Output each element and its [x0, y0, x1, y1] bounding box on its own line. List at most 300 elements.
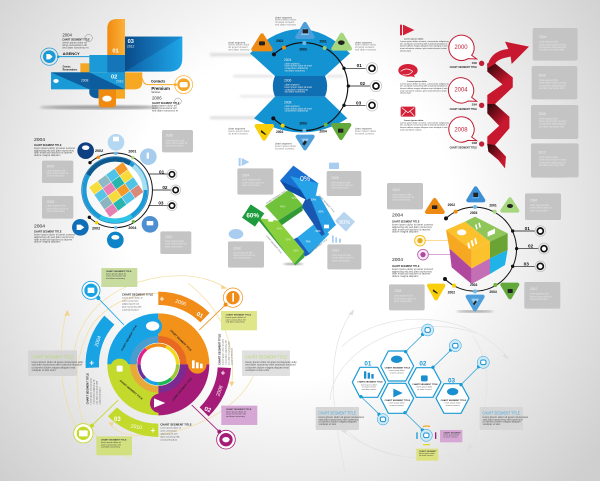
- grey box text: sed diam nonummy nibh: [539, 50, 565, 52]
- black text blocks: 2004: [34, 224, 45, 230]
- hexagon text: lorem ipsum dolor: [445, 402, 461, 405]
- blue bottom shape: [254, 97, 347, 132]
- grey box labels: chart segment title: [166, 139, 185, 142]
- grey tile titles: ut laoreet dolore magna aliquam erat: [32, 365, 75, 369]
- thin orbit arrows: [330, 310, 508, 472]
- year labels: 2002: [448, 203, 455, 207]
- grey box text: 2008: [538, 112, 546, 116]
- quadrant titles: CHART SEGMENT TITLE: [172, 377, 193, 402]
- panel: blue timeline arc: [210, 15, 382, 150]
- hexagon numbers: [364, 360, 456, 384]
- grey box labels: lorem ipsum dolor sit: [165, 243, 187, 246]
- hexagon text: lorem ipsum dolor: [416, 386, 433, 389]
- year labels: 2002: [276, 130, 284, 134]
- grey box text: chart segment title: [331, 181, 351, 184]
- hexagon text: lorem ipsum dolor: [361, 383, 377, 386]
- white arc text: lorem ipsum dolor sit amet: [285, 107, 312, 110]
- side text blocks: euismod tincidunt: [99, 387, 102, 404]
- year labels: [276, 39, 327, 134]
- grey box text: lorem ipsum dolor sit: [394, 297, 416, 300]
- hexagons: [352, 351, 469, 413]
- grey tile titles: volutpat ut wisi enim: [32, 368, 56, 372]
- quadrant titles: CHART SEGMENT TITLE: [169, 329, 192, 352]
- callout text: CHART SEGMENT TITLE: [226, 408, 252, 411]
- band labels: 03: [114, 417, 121, 423]
- tile text: sit amet consect: [443, 435, 458, 438]
- year labels: 2002: [448, 291, 455, 295]
- left text blocks: Lorem ipsum dolor sit amet, consectetur adipiscing: [400, 82, 449, 85]
- black text blocks: CHART SEGMENT TITLE: [392, 221, 420, 224]
- grey box text: amet consectetur: [394, 300, 412, 303]
- band labels: 2004: [94, 335, 103, 348]
- year labels: 2001: [128, 149, 136, 153]
- tile text: CHART SEGMENT: [443, 431, 461, 434]
- grey box text: chart segment title: [539, 79, 559, 82]
- percent 60 tile: [242, 204, 264, 227]
- red icons: [398, 25, 418, 117]
- side text blocks: sed diam nonummy nibh: [229, 341, 231, 365]
- grey box labels: [47, 134, 187, 248]
- black arc: [88, 152, 152, 229]
- grey box text: chart segment title: [242, 179, 262, 182]
- grey side tiles: ut laoreet dolore magna aliquam: [483, 420, 522, 424]
- panel: agency blue and orange blocks: 2006: [152, 95, 162, 100]
- band labels: 01: [195, 312, 204, 320]
- callout text: lorem ipsum dolor sit: [226, 410, 246, 413]
- grey box text: sed diam nonummy nibh: [539, 126, 565, 128]
- panel: agency blue and orange blocks: CHART SEGMENT TITLE: [152, 102, 180, 105]
- band labels: 2006: [174, 299, 187, 308]
- tile percents: 50%: [292, 196, 298, 200]
- connectors and nodes: [74, 281, 243, 449]
- bubble captions: CHART SEGMENT TITLE: [450, 108, 477, 111]
- tile text: sit amet consect: [419, 454, 434, 457]
- side text blocks: euismod tincidunt: [160, 439, 177, 442]
- year labels: 2001: [319, 39, 327, 43]
- grey box labels: amet consectetur: [166, 145, 184, 148]
- number labels: 02: [111, 74, 117, 80]
- triangle badges: [253, 24, 350, 148]
- grey box text: lorem ipsum dolor sit amet: [539, 43, 567, 46]
- side text blocks: sit amet consect: [275, 146, 294, 150]
- grey box labels: amet consectetur: [47, 210, 65, 213]
- black text blocks: nibh euismod tincidunt ut laoreet: [392, 227, 431, 231]
- side text blocks: sit amet consect: [355, 131, 374, 135]
- side text blocks: consectetur adipiscing elit: [225, 340, 228, 365]
- callout text: [101, 270, 252, 449]
- hexagon icons: [364, 356, 458, 397]
- callout text: amet consectetur elit: [106, 275, 126, 278]
- quadrant titles: CHART SEGMENT TITLE: [121, 324, 138, 351]
- number labels: 03: [128, 39, 134, 45]
- centre colour ring: [138, 344, 178, 384]
- panel: agency blue and orange blocks: Contacts: [151, 79, 165, 83]
- quadrant titles: [119, 324, 193, 402]
- quadrant icons: [117, 321, 203, 408]
- tile percents: 40%: [277, 226, 283, 230]
- white arc text: consectetur adipiscing: [285, 67, 308, 70]
- grey box text: 2004: [392, 188, 400, 192]
- grey box text: 2004: [242, 174, 250, 178]
- tile percents: 70%: [285, 238, 291, 242]
- grey box labels: lorem ipsum dolor sit: [47, 207, 68, 210]
- connectors 01 02 03: 01: [159, 169, 165, 174]
- quadrant titles: CHART SEGMENT TITLE: [119, 379, 143, 401]
- side text blocks: diam nonummy nibh: [160, 437, 181, 439]
- grey box text: amet consectetur: [392, 199, 410, 202]
- colour grid: [89, 162, 144, 217]
- connectors 01 02 03: [511, 226, 549, 272]
- connectors 01 02 03: 02: [360, 81, 366, 86]
- connectors 01 02 03: 03: [158, 201, 164, 206]
- panel: agency blue and orange blocks: amet consectetur elit: [152, 106, 177, 110]
- ribbon: [487, 42, 529, 168]
- grey side tiles: volutpat ut wisi: [483, 422, 500, 426]
- side text blocks: diam nonummy nibh: [122, 307, 142, 309]
- white arc text: lorem ipsum dolor sit amet: [285, 86, 312, 89]
- grey tile titles: sed diam nonummy nibh euismod tincidunt: [245, 363, 296, 367]
- side text blocks: sit amet consect: [355, 45, 374, 49]
- left node: [41, 48, 89, 65]
- grey box text: [538, 35, 567, 167]
- text blocks: amet consectetur elit: [62, 43, 87, 47]
- side text blocks: sed diam nonumy: [275, 22, 297, 26]
- white arc text: chart segment: [285, 84, 300, 87]
- side text blocks: sit amet consect: [228, 131, 248, 135]
- grey box text: amet consectetur: [233, 257, 251, 260]
- grey box labels: amet consectetur: [47, 175, 65, 178]
- diagonal captions: CHART SEGMENT TITLE: [318, 194, 336, 214]
- panel: isometric percent square: 60%: [246, 213, 259, 220]
- side text blocks: chart segment: [355, 40, 372, 44]
- black text blocks: 2004: [392, 257, 403, 263]
- blue cube: [280, 166, 318, 200]
- text blocks: lorem ipsum dolor sit: [62, 41, 87, 45]
- side text blocks: [228, 15, 377, 150]
- grey tile titles: ut laoreet dolore magna aliquam erat: [245, 365, 289, 369]
- text blocks: [62, 32, 92, 49]
- year labels: 2004: [128, 226, 137, 230]
- black text blocks: adipiscing elit sed diam nonummy: [392, 269, 433, 273]
- year labels: 2003: [299, 47, 307, 51]
- white arc text: 2006: [284, 79, 292, 83]
- callout text: amet consectetur elit: [226, 413, 246, 416]
- grey box text: lorem ipsum dolor sit amet: [539, 82, 567, 85]
- black text blocks: dolore magna aliquam: [34, 240, 61, 244]
- side text blocks: CHART SEGMENT TITLE: [86, 373, 90, 404]
- year labels: 2004: [489, 290, 497, 294]
- black text blocks: lorem ipsum dolor sit amet consect: [34, 233, 75, 237]
- text blocks: sed diam nonummy et: [62, 45, 89, 49]
- side text blocks: lorem ipsum dolor: [228, 43, 250, 47]
- grey side tiles: lorem ipsum dolor sit amet consectetur: [319, 415, 364, 419]
- callout text: sed diam nonummy: [106, 278, 126, 280]
- black text blocks: adipiscing elit sed diam nonummy: [392, 225, 433, 229]
- grey box text: chart segment title: [539, 41, 559, 44]
- grey box text: lorem ipsum dolor sit: [233, 254, 255, 257]
- band labels: +: [160, 295, 165, 304]
- black text blocks: [392, 212, 433, 278]
- left text blocks: Lorem ipsum dolor: [404, 120, 424, 122]
- grey box labels: amet consectetur: [165, 245, 183, 248]
- callout text: amet consectetur elit: [226, 318, 246, 321]
- grey box text: lorem ipsum dolor sit: [530, 295, 552, 298]
- white arc text: [284, 58, 312, 113]
- white arc text: 2008: [284, 100, 292, 104]
- year labels: 2000: [454, 45, 468, 51]
- black text blocks: [34, 137, 75, 244]
- grey side tiles: CHART SEGMENT TITLE: [318, 410, 356, 415]
- tile percents: 40%: [280, 204, 286, 208]
- side text blocks: [86, 293, 234, 442]
- panel: isometric percent square: [228, 158, 361, 269]
- diagonal captions: CHART SEGMENT TITLE: [265, 235, 283, 255]
- side icons: [229, 158, 341, 243]
- black text blocks: lorem ipsum dolor sit amet consect: [392, 223, 433, 227]
- grey box text: consectetur adipiscing elit: [539, 161, 566, 164]
- grey box text: chart segment title: [233, 251, 253, 254]
- tile text: [419, 431, 461, 457]
- grey box text: lorem ipsum dolor sit amet: [539, 159, 567, 162]
- quadrants: [107, 313, 209, 415]
- black text blocks: lorem ipsum dolor sit amet consect: [392, 267, 433, 271]
- panel: agency blue and orange blocks: AGENCY: [63, 51, 80, 56]
- blue lower arm: [293, 223, 329, 257]
- lower blue block 02: [89, 72, 125, 89]
- year labels: [92, 149, 137, 230]
- grey side tiles: sed diam nonummy nibh euismod: [483, 417, 523, 421]
- panel: agency blue and orange blocks: 2008: [81, 79, 89, 83]
- number labels: [111, 39, 134, 80]
- grey box text: chart segment title: [530, 293, 550, 296]
- text blocks: 2004: [62, 32, 73, 37]
- side text blocks: lorem ipsum dolor: [275, 144, 296, 148]
- connectors 01 02 03: [342, 63, 382, 111]
- left text blocks: Lorem ipsum dolor: [404, 39, 424, 41]
- grey box text: lorem ipsum dolor sit: [242, 181, 264, 184]
- black text blocks: CHART SEGMENT TITLE: [392, 265, 420, 268]
- panel: hexagon network: [316, 309, 528, 472]
- band labels: 2010: [130, 423, 142, 431]
- grey box text: lorem ipsum dolor sit: [331, 184, 353, 187]
- grey tile titles: CHART SEGMENT TITLE: [245, 354, 288, 360]
- grey box text: chart segment title: [392, 193, 412, 196]
- grey tile titles: lorem ipsum dolor sit amet consectetur adip: [245, 360, 297, 364]
- callout text: sed diam nonummy: [226, 322, 245, 324]
- grey box text: lorem ipsum dolor sit: [332, 257, 354, 260]
- connectors 01 02 03: 01: [525, 226, 530, 231]
- side text blocks: chart segment: [228, 40, 245, 44]
- hexagon text: lorem ipsum dolor: [389, 369, 405, 372]
- side text blocks: Lorem ipsum dolor sit amet: [222, 339, 225, 365]
- grey box text: lorem ipsum dolor sit: [530, 207, 552, 210]
- side text blocks: amet consectetur: [122, 300, 139, 303]
- blue right arm: [302, 193, 336, 236]
- grey side tiles: ut laoreet dolore magna aliquam: [319, 420, 358, 424]
- year labels: [448, 203, 497, 295]
- year labels: 2003: [470, 211, 478, 215]
- panel: isometric percent square: 90%: [339, 220, 350, 226]
- hexagon text: CHART SEGMENT TITLE: [385, 366, 411, 369]
- grey box text: consectetur adipiscing elit: [539, 84, 566, 87]
- connectors 01 02 03: [148, 169, 181, 211]
- grey box text: amet consectetur: [530, 298, 548, 301]
- diagonal captions: [265, 189, 336, 255]
- grey box text: sed diam nonummy nibh: [539, 88, 565, 90]
- diagonal captions: CHART SEGMENT TITLE: [308, 238, 329, 255]
- panel: colour cube circle: [34, 130, 193, 254]
- side text blocks: consectetur adipiscing elit: [93, 379, 96, 404]
- text blocks: CHART SEGMENT TITLE: [62, 38, 90, 41]
- grey tile titles: CHART SEGMENT TITLE: [31, 354, 74, 360]
- side text blocks: Lorem ipsum dolor sit: [122, 297, 143, 300]
- left text blocks: Lorem ipsum dolor sit amet, consectetur adipiscing: [400, 121, 449, 124]
- red dots: [479, 61, 484, 147]
- side text blocks: lorem ipsum dolor: [228, 129, 250, 133]
- panel: segmented circle: [28, 268, 297, 458]
- side text blocks: chart segment: [228, 127, 245, 131]
- grey box text: 2004: [539, 35, 547, 39]
- grey tile titles: sed diam nonummy nibh euismod tincidunt: [32, 363, 82, 367]
- grey box labels: lorem ipsum dolor sit: [47, 172, 68, 175]
- black text blocks: 2004: [34, 137, 45, 143]
- year labels: 2002: [95, 149, 103, 153]
- left text blocks: ullamcorper: [400, 92, 412, 95]
- purple band: [200, 367, 231, 416]
- node icons: [359, 324, 489, 441]
- tile text: lorem ipsum dolor: [443, 433, 459, 436]
- side text blocks: sed diam nonumy: [355, 47, 377, 51]
- blue middle: [273, 76, 327, 97]
- panel: agency blue and orange blocks: lorem ipsum dolor sit: [152, 104, 177, 108]
- black text blocks: dolore magna aliquam: [392, 230, 419, 234]
- hexagon text: sit amet consect: [389, 371, 404, 374]
- year labels: 2004: [319, 130, 327, 134]
- left text blocks: [400, 39, 449, 131]
- white arc text: consectetur adipiscing: [285, 110, 308, 113]
- connectors 01 02 03: 03: [356, 100, 362, 105]
- white arc text: lorem ipsum dolor sit amet: [285, 65, 312, 68]
- side text blocks: sed diam nonumy: [228, 47, 250, 51]
- panel: agency blue and orange blocks: Services: [151, 91, 161, 94]
- panel: agency blue and orange blocks: [40, 19, 193, 112]
- year bubbles: [448, 35, 477, 142]
- grey box text: consectetur adipiscing elit: [539, 46, 566, 49]
- orbit arrowheads: [341, 309, 509, 451]
- left text blocks: enim ad minim veniam, quis nostrud exerci tation: [400, 47, 448, 50]
- callout text: lorem ipsum dolor sit: [101, 441, 121, 444]
- blue top shape: [250, 29, 350, 76]
- grey box text: amet consectetur: [242, 184, 260, 187]
- side text blocks: chart segment: [275, 142, 292, 146]
- grey side tiles: sed diam nonummy nibh euismod: [319, 417, 359, 421]
- grey box text: 2012: [530, 287, 538, 291]
- envelope icons: [268, 218, 329, 228]
- hexagon text: [357, 366, 467, 407]
- band labels: 02: [203, 407, 212, 414]
- grey side tiles: CHART SEGMENT TITLE: [482, 410, 520, 415]
- band labels: +: [89, 359, 94, 368]
- grey side tiles: lorem ipsum dolor sit amet consectetur: [483, 415, 528, 419]
- grey tile titles: volutpat ut wisi enim: [245, 368, 270, 372]
- grey box text: [392, 188, 552, 303]
- grey boxes: [387, 170, 567, 310]
- grey box text: amet consectetur: [332, 259, 350, 262]
- tile percents: 50%: [311, 198, 317, 202]
- grey tile titles: lorem ipsum dolor sit amet consectetur adip: [32, 360, 84, 364]
- grey box text: 2008: [394, 289, 402, 293]
- hexagon text: CHART SEGMENT TITLE: [357, 380, 383, 383]
- year labels: 2004: [454, 88, 468, 94]
- black text blocks: lorem ipsum dolor sit amet consect: [34, 146, 75, 150]
- hexagon text: CHART SEGMENT TITLE: [441, 399, 467, 402]
- callout text: CHART SEGMENT TITLE: [101, 439, 127, 442]
- year labels: 2008: [454, 127, 468, 133]
- coloured tiles: [416, 430, 462, 461]
- black text blocks: dolore magna aliquam: [34, 153, 61, 157]
- connectors 01 02 03: 02: [162, 185, 168, 190]
- left text blocks: Lorem ipsum dolor sit amet, consectetur adipiscing: [400, 40, 449, 43]
- cube icons: [457, 222, 495, 249]
- black arc: [443, 205, 517, 293]
- black text blocks: dolore magna aliquam: [392, 274, 419, 278]
- grey box text: 2006: [530, 199, 538, 203]
- cube: [446, 217, 508, 284]
- black text blocks: nibh euismod tincidunt ut laoreet: [34, 237, 73, 241]
- black text blocks: adipiscing elit sed diam nonummy: [34, 235, 75, 239]
- side text blocks: CHART SEGMENT TITLE: [122, 293, 154, 297]
- side text blocks: CHART SEGMENT TITLE: [218, 333, 222, 365]
- panel: 3D colour cube: [387, 170, 567, 312]
- grey box text: 2012: [538, 150, 546, 154]
- hexagon numbers: 03: [448, 377, 456, 384]
- panel: agency blue and orange blocks: 2012: [127, 45, 135, 49]
- side text blocks: sit amet consect: [228, 45, 248, 49]
- grey box text: chart segment title: [539, 117, 559, 120]
- icon white details: [401, 69, 414, 116]
- side text blocks: lorem ipsum dolor: [275, 18, 296, 22]
- callout text: lorem ipsum dolor sit: [106, 272, 126, 275]
- black text blocks: CHART SEGMENT TITLE: [34, 231, 62, 234]
- grey box text: chart segment title: [332, 254, 352, 257]
- hexagon text: lorem ipsum dolor: [389, 402, 405, 405]
- central blue block: [89, 55, 125, 72]
- connectors 01 02 03: 02: [528, 243, 534, 248]
- panel: agency blue and orange blocks: Reservations: [63, 69, 78, 72]
- left text blocks: laoreet dolore magna aliquam erat volutpat ut wisi: [400, 126, 448, 129]
- left text blocks: ullamcorper: [400, 49, 412, 52]
- side text blocks: adipiscing elit sed: [160, 433, 178, 436]
- left text blocks: laoreet dolore magna aliquam erat volutpat ut wisi: [400, 87, 448, 90]
- grey box text: 2008: [233, 246, 241, 250]
- connectors 01 02 03: 03: [524, 261, 529, 266]
- callout text: lorem ipsum dolor sit: [226, 316, 246, 319]
- side text blocks: euismod tincidunt: [231, 348, 234, 365]
- year labels: 2002: [92, 226, 100, 230]
- tile percents: 80%: [293, 249, 299, 253]
- left text blocks: enim ad minim veniam, quis nostrud exerci tation: [400, 89, 448, 92]
- ring: [82, 157, 148, 223]
- grey box text: 2006: [331, 176, 339, 180]
- side text blocks: sit amet consect: [275, 20, 294, 24]
- grey box text: chart segment title: [530, 204, 550, 207]
- bubble captions: 2008: [472, 143, 478, 145]
- grey box text: 2012: [332, 249, 340, 253]
- right node: [142, 76, 193, 94]
- side text blocks: Lorem ipsum dolor sit: [160, 427, 181, 430]
- tile percents: 60%: [315, 229, 321, 233]
- outer bands: [158, 292, 210, 322]
